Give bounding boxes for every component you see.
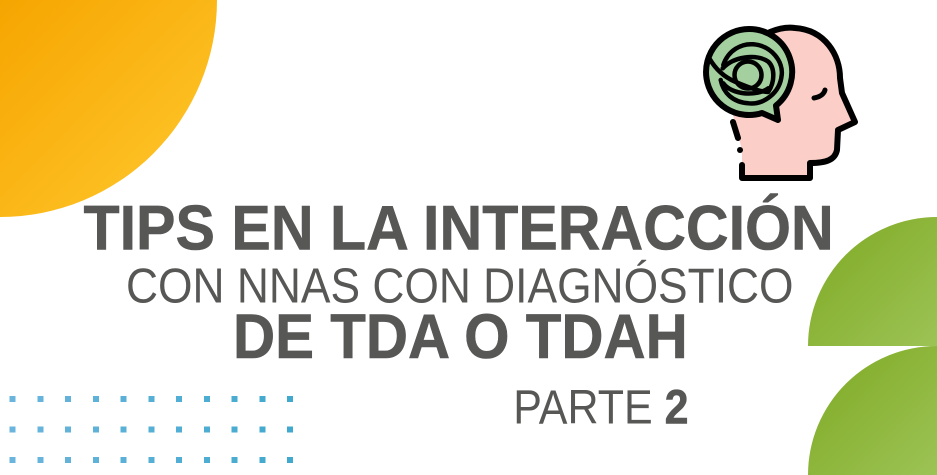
title line 3: DE TDA O TDAH — [233, 301, 688, 371]
part label: PARTE 2 — [513, 380, 689, 434]
orange quarter circle — [0, 0, 217, 217]
icon: head with tangled speech bubble — [706, 28, 855, 178]
lower green quarter circle — [808, 346, 937, 475]
title line 2: CON NNAS CON DIAGNÓSTICO — [126, 259, 794, 313]
title line 1: TIPS EN LA INTERACCIÓN — [84, 193, 834, 263]
dotted pattern — [10, 396, 293, 463]
upper green quarter circle — [808, 217, 937, 346]
